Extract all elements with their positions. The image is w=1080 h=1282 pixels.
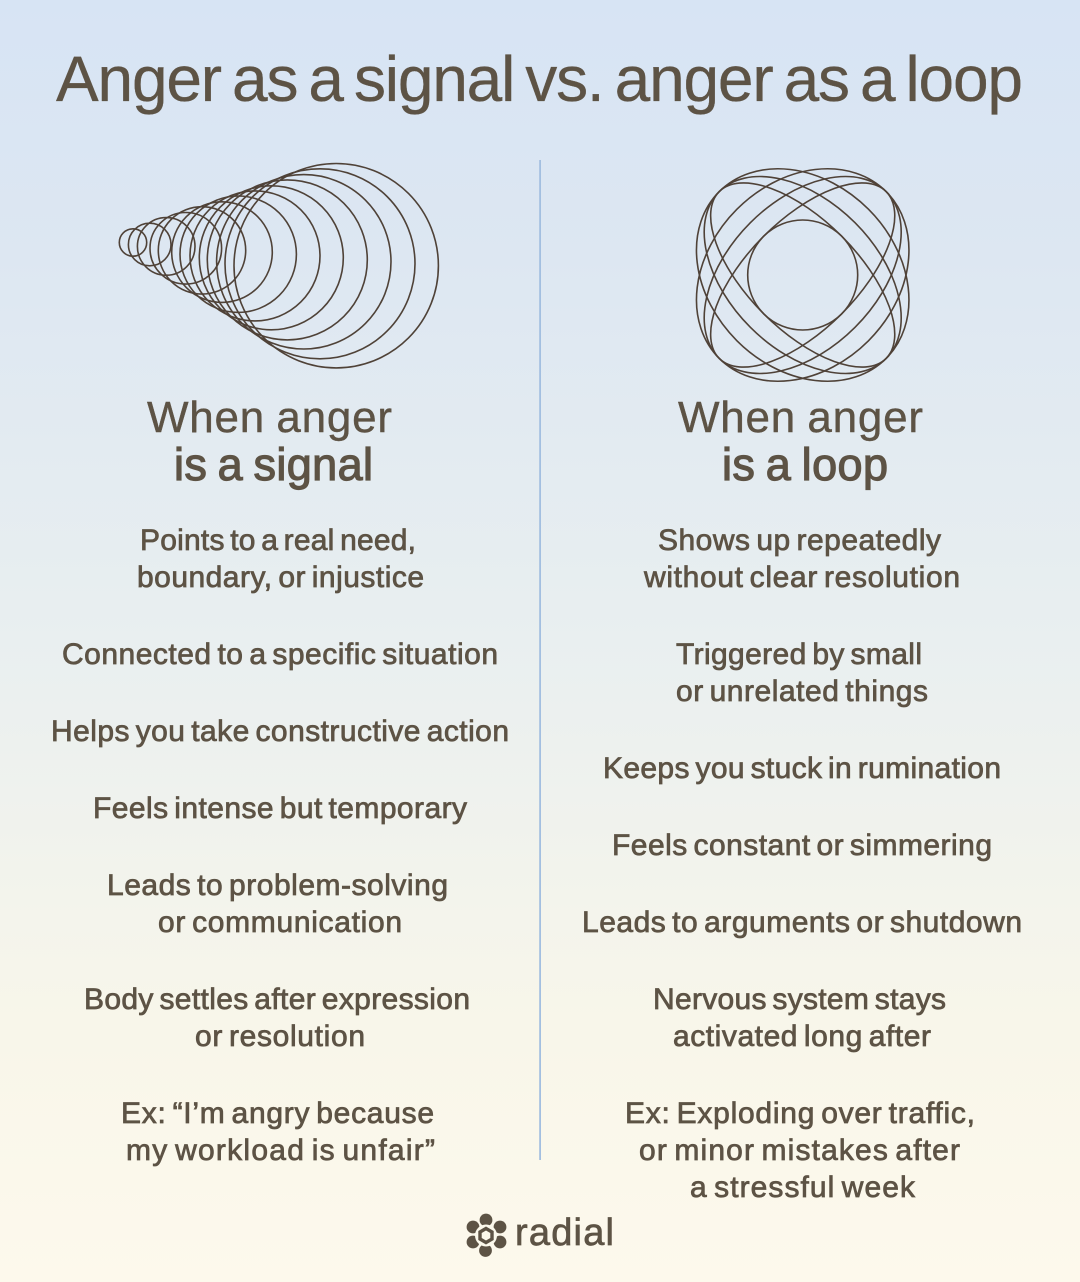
text: leads to problem-solving: [107, 869, 448, 939]
text: points to a real need: Points to a real need,: [140, 524, 416, 557]
text: loop example: Ex: Exploding over traffic,: [625, 1097, 975, 1130]
text: triggered by small things: Triggered by small: [676, 638, 922, 671]
heading: when anger is a signal: [147, 393, 392, 490]
text: signal example: Ex: “I’m angry because: [121, 1097, 434, 1130]
text: body settles: Body settles after expression: [84, 983, 470, 1016]
text: triggered by small things: [676, 638, 928, 708]
panel: anger as a loop: [582, 126, 1022, 1204]
text: leads to arguments or shutdown: Leads to arguments or shutdown: [582, 906, 1022, 939]
heading: when anger is a loop: When anger: [678, 393, 923, 442]
heading: when anger is a loop: is a loop: [722, 439, 888, 490]
text: connected to a specific situation: Connected to a specific situation: [62, 638, 498, 671]
text: nervous system stays activated: Nervous system stays: [653, 983, 946, 1016]
text: feels constant or simmering: Feels constant or simmering: [612, 829, 992, 862]
heading: when anger is a loop: [678, 393, 923, 490]
wordmark: radial: [515, 1212, 613, 1254]
text: nervous system stays activated: activated long after: [673, 1020, 931, 1053]
text: keeps you stuck in rumination: Keeps you stuck in rumination: [603, 752, 1001, 785]
icon: radial flower: [467, 1214, 506, 1257]
text: signal example: [121, 1097, 435, 1167]
icon: looping ellipses: [654, 126, 952, 424]
text: feels intense but temporary: Feels intense but temporary: [93, 792, 467, 825]
text: body settles: or resolution: [195, 1020, 365, 1053]
text: leads to problem-solving: Leads to problem-solving: [107, 869, 448, 902]
text: shows up repeatedly: [643, 524, 960, 594]
heading: when anger is a signal: When anger: [147, 393, 392, 442]
text: shows up repeatedly: without clear resolution: [643, 561, 960, 594]
text: nervous system stays activated: [653, 983, 946, 1053]
text: leads to problem-solving: or communication: [158, 906, 402, 939]
text: body settles: [84, 983, 470, 1053]
heading: when anger is a signal: is a signal: [174, 439, 373, 490]
text: helps you take constructive action: Helps you take constructive action: [51, 715, 509, 748]
text: points to a real need: boundary, or injustice: [137, 561, 424, 594]
text: shows up repeatedly: Shows up repeatedly: [658, 524, 941, 557]
logo: radial: [467, 1212, 613, 1257]
panel: anger as a signal: [51, 164, 509, 1167]
title: Anger as a signal vs. anger as a loop: [56, 43, 1023, 115]
text: loop example: a stressful week: [690, 1171, 916, 1204]
text: signal example: my workload is unfair”: [126, 1134, 435, 1167]
text: loop example: or minor mistakes after: [639, 1134, 960, 1167]
text: loop example: [625, 1097, 975, 1204]
text: triggered by small things: or unrelated things: [676, 675, 928, 708]
text: points to a real need: [137, 524, 424, 594]
icon: expanding circles cone: [119, 164, 438, 368]
